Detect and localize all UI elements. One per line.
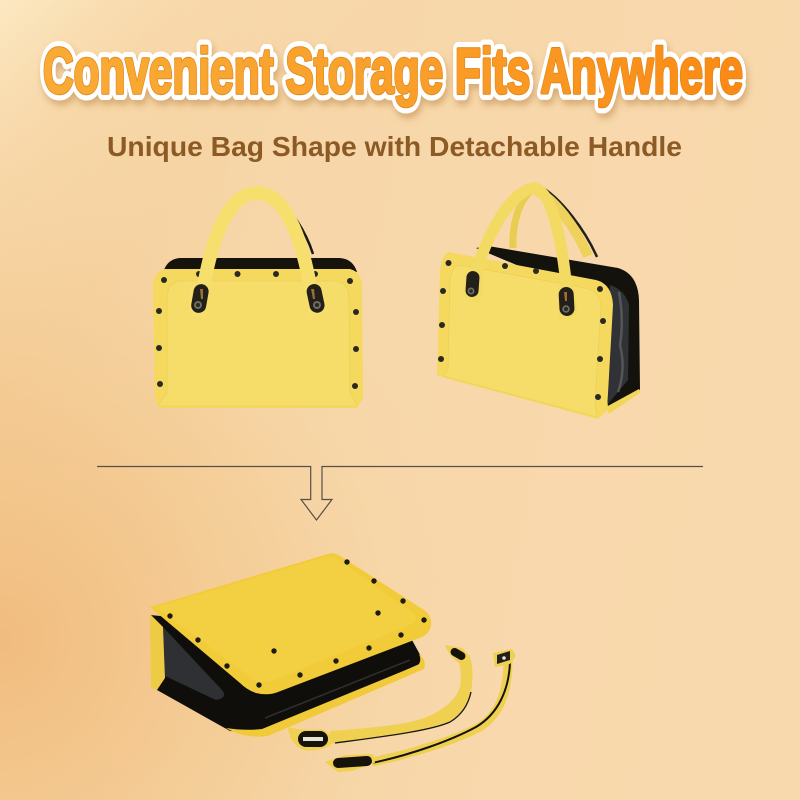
handle tab right: [305, 283, 328, 319]
front handle: [474, 188, 567, 292]
handle two: [325, 649, 516, 772]
back handle: [513, 190, 532, 248]
inner panel: [158, 281, 357, 406]
back panel black: [476, 246, 640, 408]
inner panel: [443, 265, 601, 417]
rivets: [167, 559, 427, 688]
handle tab right: [558, 284, 577, 320]
subtitle: Unique Bag Shape with Detachable Handle: [107, 131, 682, 162]
back handle strap: [538, 185, 597, 257]
glossy gusset highlight: [163, 627, 224, 700]
handle one tab bottom: [288, 727, 334, 750]
top panel: [150, 553, 431, 694]
rear bottom yellow: [606, 389, 641, 414]
handle one tab top: [445, 645, 470, 664]
bag body: [437, 252, 613, 419]
rivets: [438, 260, 606, 400]
inner panel: [156, 556, 416, 682]
black top band: [164, 258, 357, 272]
bottom yellow edge: [226, 654, 425, 737]
handle one: [288, 645, 472, 750]
rivets: [156, 271, 359, 389]
bag: front view: [153, 192, 363, 408]
side yellow edge: [150, 614, 165, 690]
bag body: [153, 269, 363, 408]
handle two tab bottom: [325, 754, 375, 772]
gusset sheen: [265, 660, 410, 718]
bag: angled view: [437, 185, 641, 419]
bag: folded flat: [150, 553, 516, 772]
black gusset: [150, 615, 424, 733]
handle tab left: [189, 281, 210, 317]
back strap of handle: [207, 192, 313, 268]
handle: [204, 193, 311, 290]
divider line with arrow: [97, 466, 703, 520]
handle two tab top: [493, 649, 516, 667]
handle tab left: [464, 267, 483, 304]
gusset: [608, 285, 629, 404]
